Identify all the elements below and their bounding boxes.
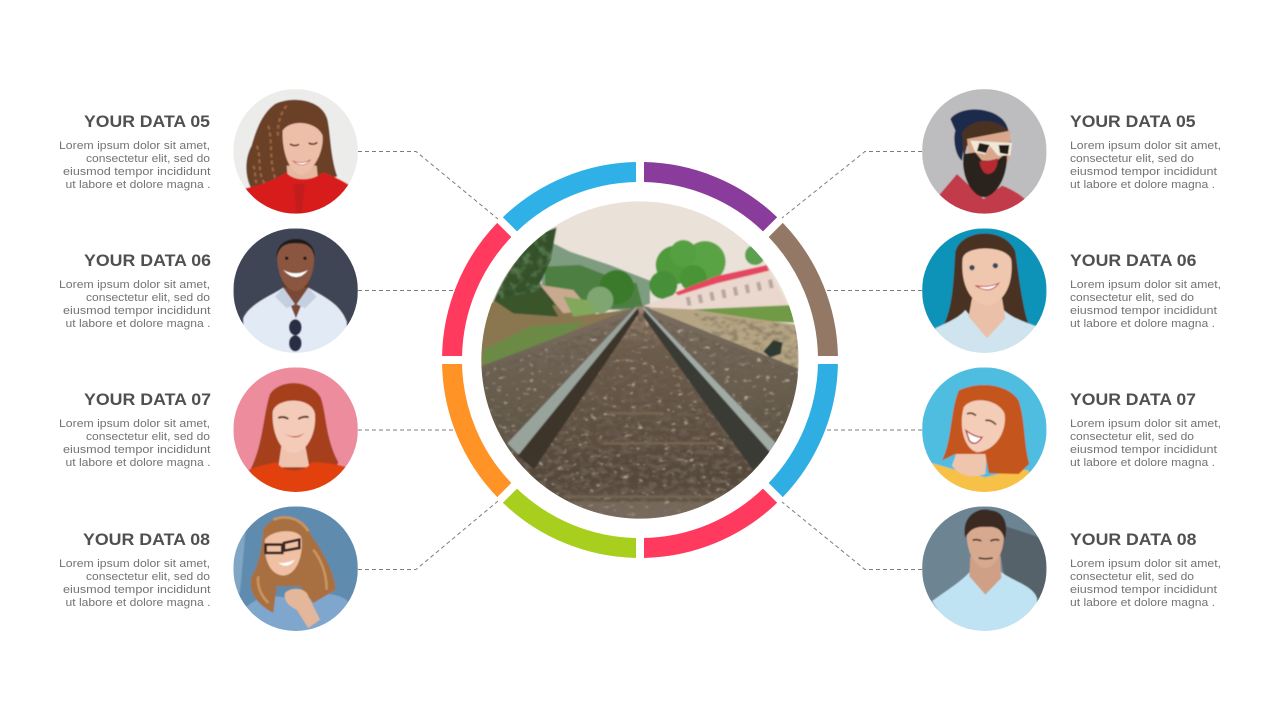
body copy: eiusmod tempor incididunt — [1070, 305, 1217, 317]
body copy: consectetur elit, sed do — [1070, 431, 1194, 443]
text block: left 06 — [59, 251, 211, 330]
body copy — [1070, 140, 1221, 191]
heading: YOUR DATA 08 — [1070, 530, 1196, 549]
body copy: Lorem ipsum dolor sit amet, — [59, 140, 210, 152]
body copy — [59, 558, 210, 609]
text block: left 05 — [59, 112, 210, 191]
body copy: Lorem ipsum dolor sit amet, — [1070, 140, 1221, 152]
text block: right 08 — [1070, 530, 1221, 609]
portrait: brown-haired woman on teal — [922, 228, 1047, 355]
body copy: eiusmod tempor incididunt — [63, 584, 210, 596]
heading: YOUR DATA 05 — [84, 112, 210, 131]
body copy: Lorem ipsum dolor sit amet, — [1070, 558, 1221, 570]
heading: YOUR DATA 05 — [1070, 112, 1196, 131]
text block: left 07 — [59, 390, 211, 469]
body copy — [59, 418, 210, 469]
body copy: eiusmod tempor incididunt — [63, 166, 210, 178]
body copy: eiusmod tempor incididunt — [1070, 584, 1217, 596]
segmented ring — [442, 162, 838, 558]
text block: right 07 — [1070, 390, 1221, 469]
body copy — [1070, 558, 1221, 609]
body copy: ut labore et dolore magna . — [1070, 179, 1215, 191]
body copy: Lorem ipsum dolor sit amet, — [1070, 279, 1221, 291]
body copy: consectetur elit, sed do — [86, 571, 210, 583]
connector lines: right side — [782, 152, 922, 570]
body copy: ut labore et dolore magna . — [66, 597, 210, 609]
portrait: laughing red-haired woman on light blue — [922, 367, 1047, 494]
body copy: ut labore et dolore magna . — [1070, 318, 1215, 330]
body copy: ut labore et dolore magna . — [1070, 457, 1215, 469]
body copy: consectetur elit, sed do — [86, 431, 210, 443]
heading: YOUR DATA 07 — [1070, 390, 1196, 409]
text block: right 06 — [1070, 251, 1221, 330]
text block: left 08 — [59, 530, 210, 609]
body copy: eiusmod tempor incididunt — [1070, 444, 1217, 456]
portrait: curly-haired woman in red sweater — [233, 89, 358, 216]
body copy: ut labore et dolore magna . — [66, 457, 210, 469]
heading: YOUR DATA 06 — [84, 251, 211, 270]
central photo: railway track — [477, 197, 803, 523]
heading: YOUR DATA 06 — [1070, 251, 1196, 270]
body copy: consectetur elit, sed do — [86, 292, 210, 304]
heading: YOUR DATA 07 — [84, 390, 211, 409]
body copy: eiusmod tempor incididunt — [63, 305, 210, 317]
body copy: consectetur elit, sed do — [1070, 153, 1194, 165]
body copy: Lorem ipsum dolor sit amet, — [59, 558, 210, 570]
body copy: consectetur elit, sed do — [86, 153, 210, 165]
portrait: woman with glasses on blue — [233, 506, 358, 633]
body copy: Lorem ipsum dolor sit amet, — [59, 279, 210, 291]
heading: YOUR DATA 08 — [83, 530, 210, 549]
body copy: ut labore et dolore magna . — [1070, 597, 1215, 609]
body copy — [59, 279, 210, 330]
body copy: ut labore et dolore magna . — [66, 318, 210, 330]
body copy: consectetur elit, sed do — [1070, 292, 1194, 304]
portrait: bearded man with beanie — [922, 89, 1047, 216]
portrait: man in light blue shirt — [922, 506, 1047, 633]
body copy: consectetur elit, sed do — [1070, 571, 1194, 583]
body copy — [1070, 279, 1221, 330]
body copy — [59, 140, 210, 191]
body copy: Lorem ipsum dolor sit amet, — [59, 418, 210, 430]
body copy: eiusmod tempor incididunt — [63, 444, 210, 456]
body copy: eiusmod tempor incididunt — [1070, 166, 1217, 178]
connector lines: left side — [358, 152, 498, 570]
text block: right 05 — [1070, 112, 1221, 191]
portrait: red-haired woman on pink — [233, 367, 358, 494]
body copy: ut labore et dolore magna . — [66, 179, 210, 191]
body copy — [1070, 418, 1221, 469]
portrait: smiling man in white shirt — [233, 228, 358, 355]
body copy: Lorem ipsum dolor sit amet, — [1070, 418, 1221, 430]
